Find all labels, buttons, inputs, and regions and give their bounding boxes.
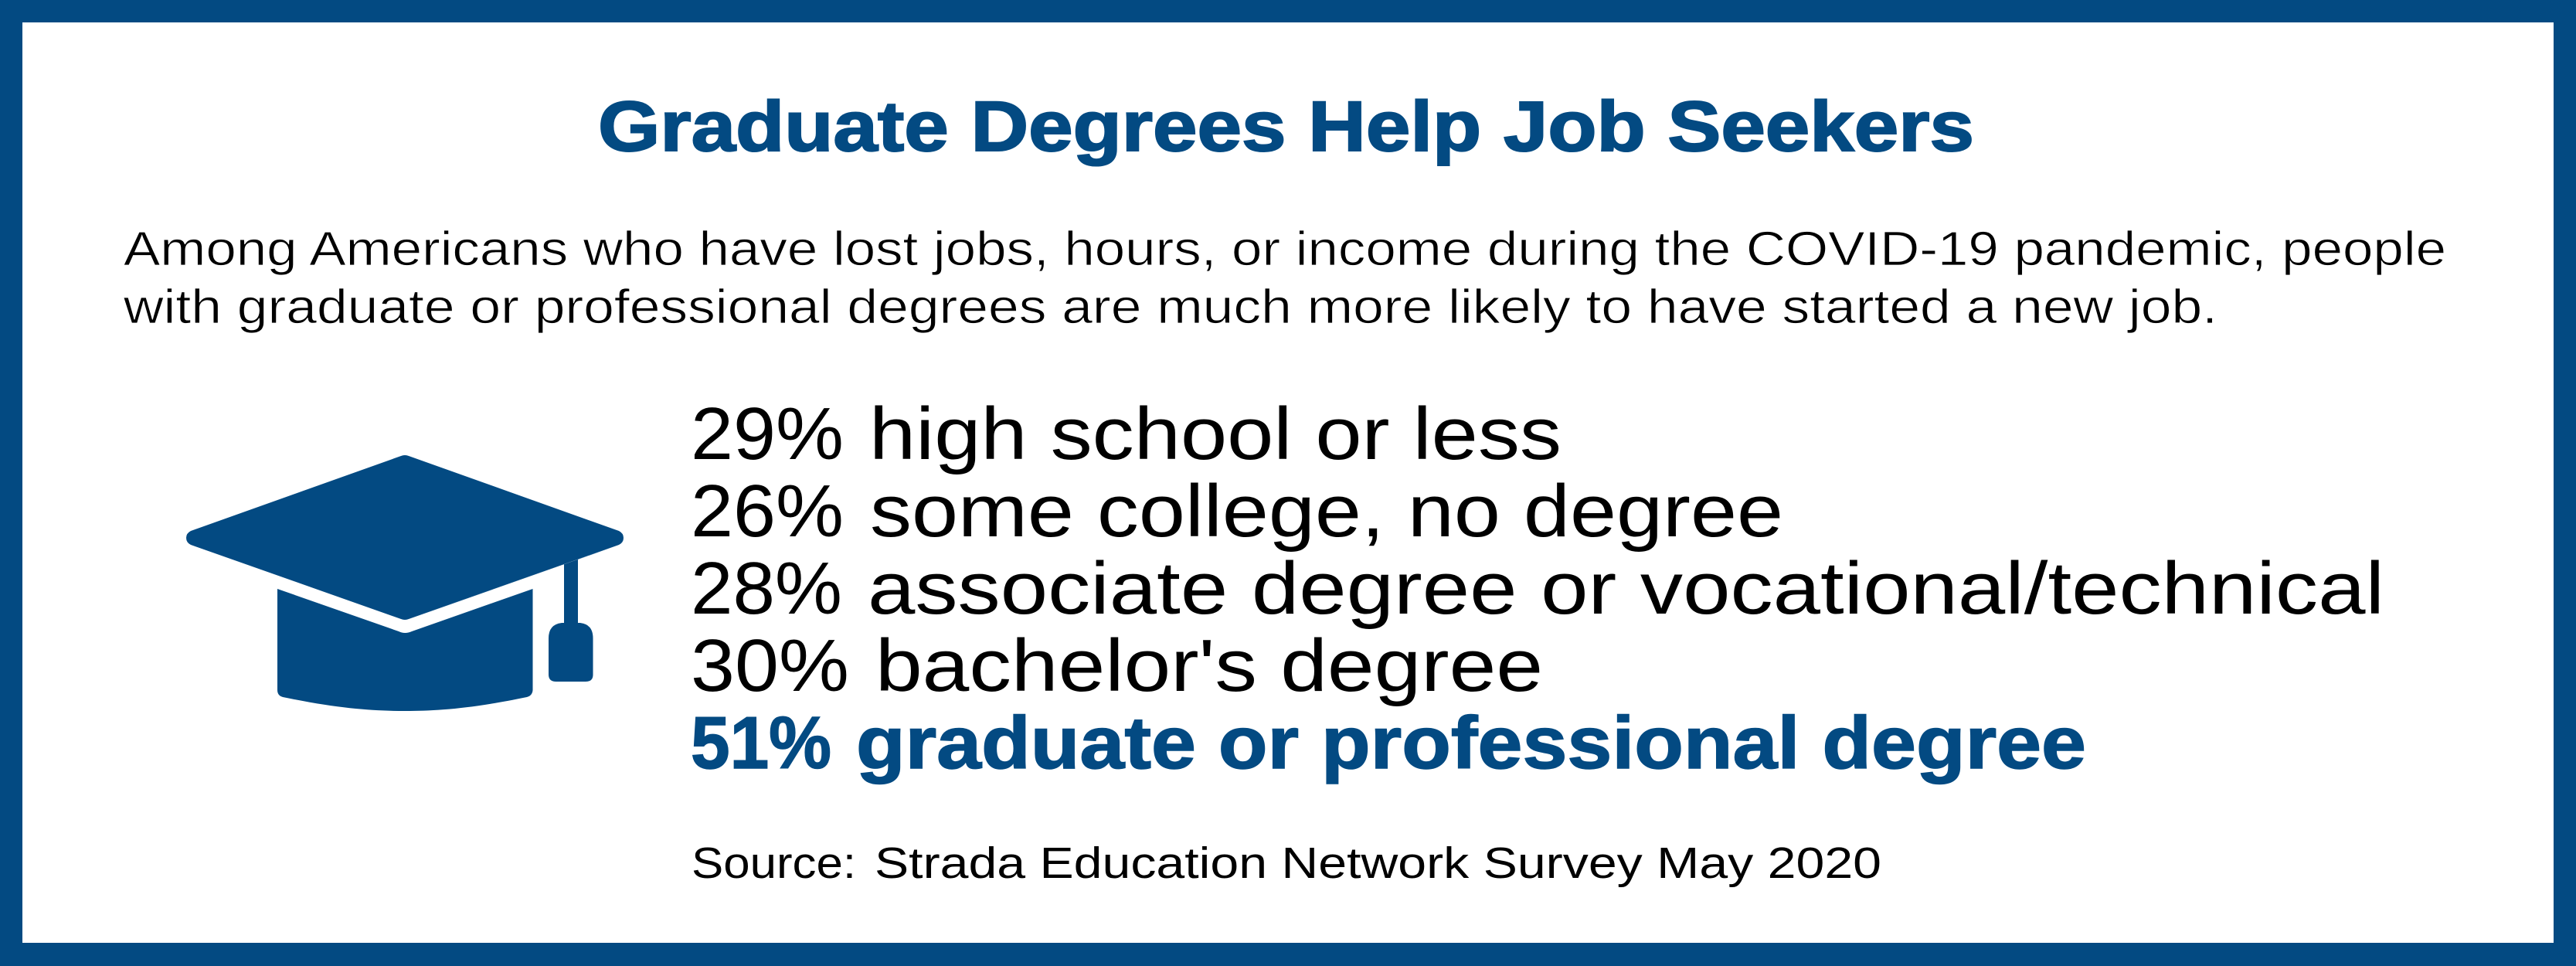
stat: some college: some college, no degree [870,470,1783,553]
stat: bachelor's degree [691,624,1543,707]
stat: bachelor's degree: bachelor's degree [875,624,1543,707]
stat: bachelor's degree: 30% [691,624,849,707]
intro paragraph [123,223,2446,334]
intro paragraph: Among Americans who have lost jobs, hours, or income during the COVID-19 pandemic, people [124,223,2446,276]
title: Graduate Degrees Help Job Seekers [598,87,1974,166]
stat: high school or less: high school or less [869,393,1562,475]
source note: Strada Education Network Survey May 2020 [875,838,1881,888]
source note: Source: [692,838,856,888]
statistics list by education level [691,393,2384,784]
icon: graduation cap [186,455,624,711]
stat: associate degree: 28% [691,547,842,630]
stat: some college: 26% [691,470,844,553]
stat: graduate or professional degree (highlighted): graduate or professional degree [856,702,2086,784]
stat: high school or less: 29% [691,393,844,475]
intro paragraph: with graduate or professional degrees are much more likely to have started a new job. [123,281,2217,334]
stat: associate degree: associate degree or vocational/technical [868,547,2384,630]
stat: graduate or professional degree (highlighted): 51% [691,702,831,784]
